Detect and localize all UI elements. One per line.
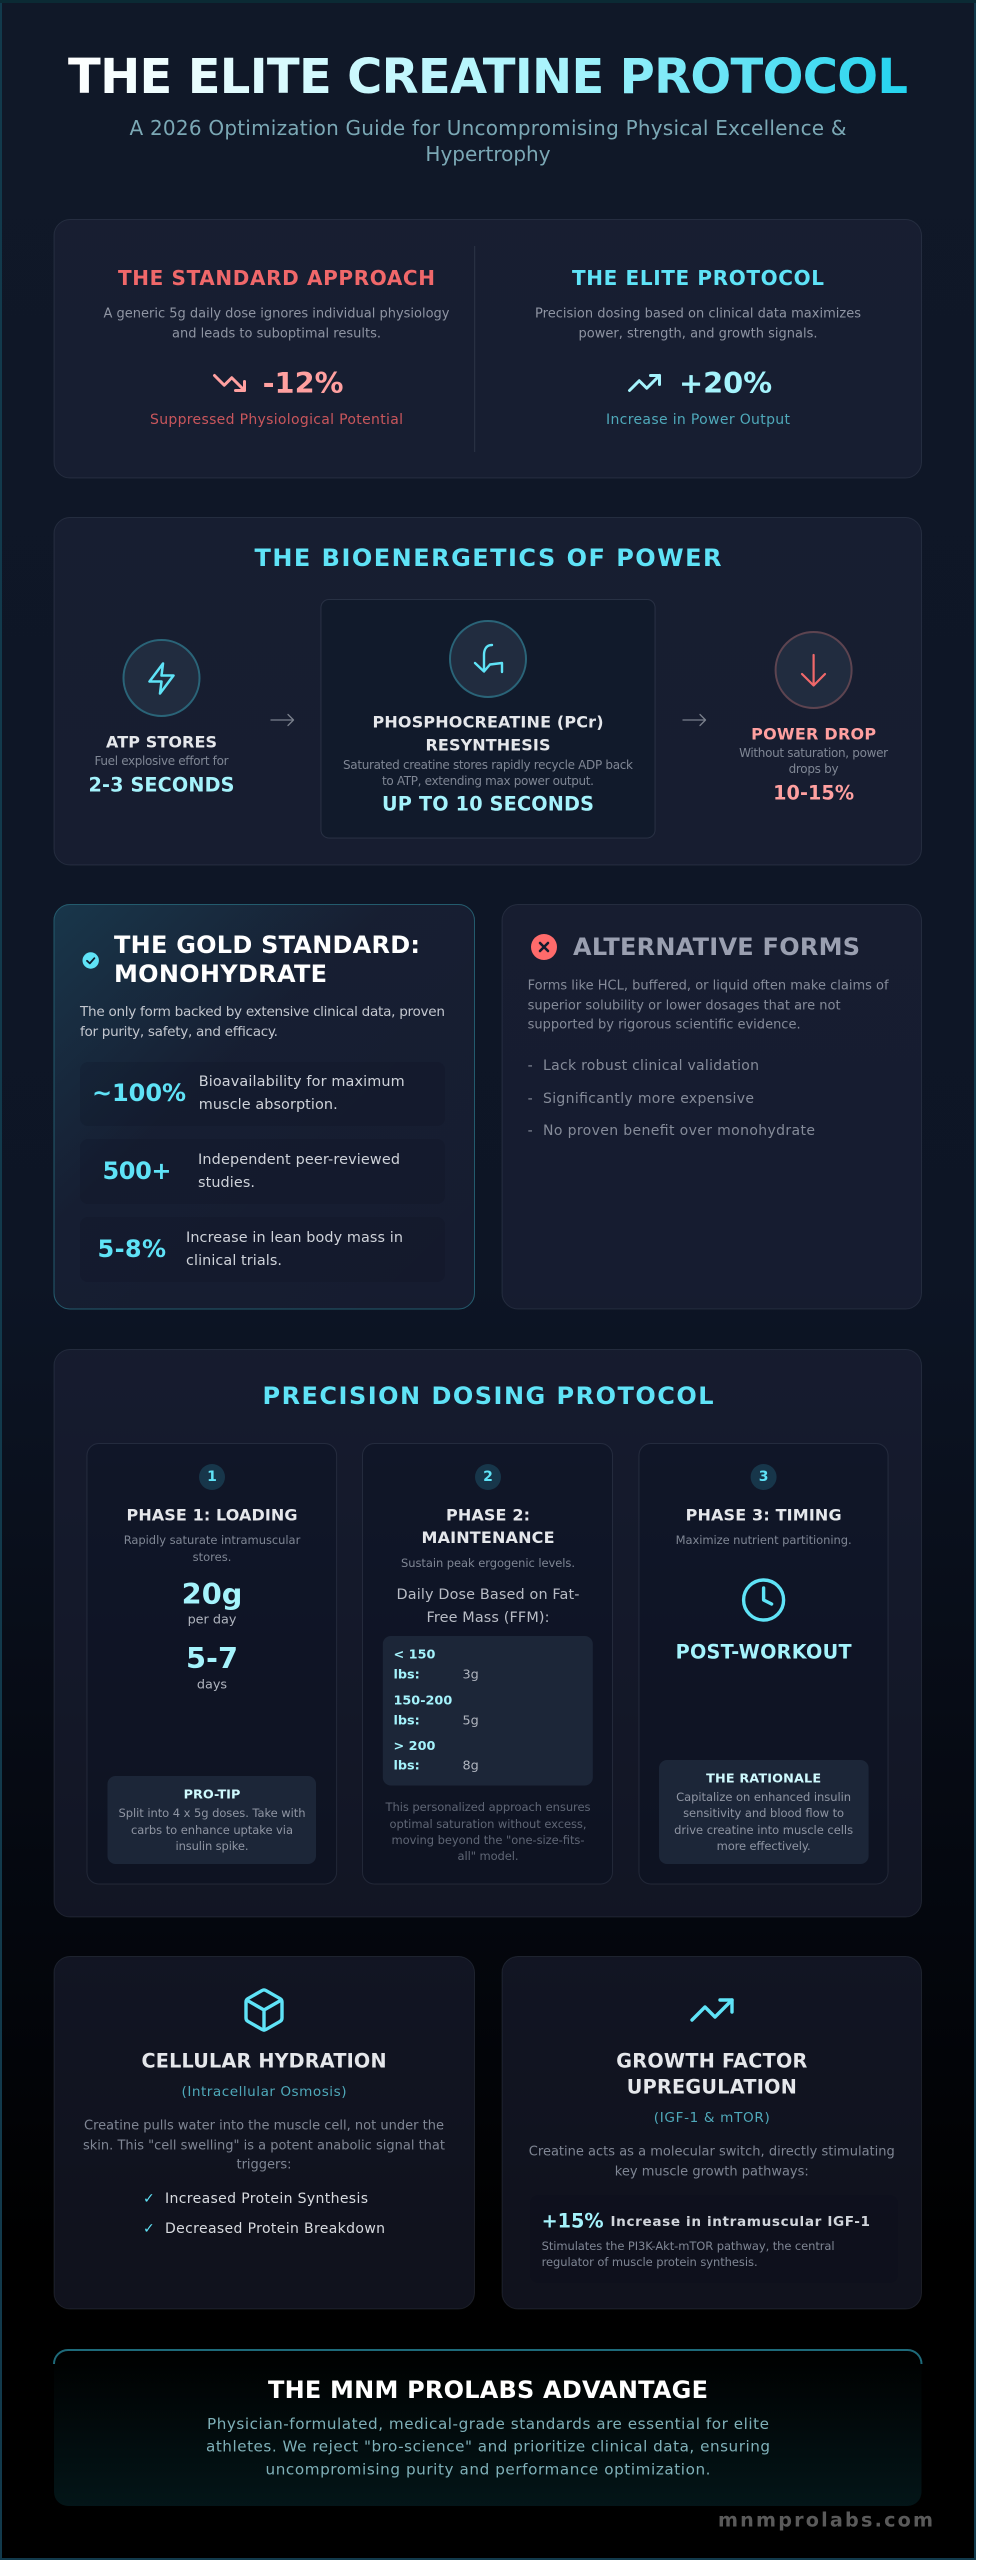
stat: bioavailability	[80, 1062, 445, 1126]
rationale: more effectively.	[717, 1839, 811, 1853]
IGF-1 stat: Stimulates the PI3K-Akt-mTOR pathway, the central	[542, 2239, 835, 2253]
panel: precision dosing protocol	[54, 1350, 922, 1917]
rationale: drive creatine into muscle cells	[674, 1823, 853, 1837]
standard approach column: and leads to suboptimal results.	[172, 326, 381, 342]
card: phase 1: Rapidly saturate intramuscular	[124, 1533, 301, 1547]
note: optimal saturation without excess,	[390, 1817, 586, 1831]
panel: growth factor upregulation: Creatine acts as a molecular switch, directly stimulating	[529, 2144, 895, 2160]
elite protocol column: +20%	[679, 366, 772, 400]
list of drawbacks: Lack robust clinical validation	[543, 1058, 759, 1074]
elite protocol column: power, strength, and growth signals.	[578, 326, 818, 342]
benefit list: ✓	[143, 2221, 155, 2237]
icon: clock	[742, 1578, 786, 1622]
icon: check badge	[82, 952, 99, 969]
benefit list: ✓	[143, 2191, 155, 2207]
stat: bioavailability: muscle absorption.	[199, 1097, 338, 1113]
dose table: 5g	[462, 1714, 479, 1728]
description	[528, 978, 889, 1032]
pro-tip: carbs to enhance uptake via	[131, 1823, 293, 1837]
card: phase 3: POST-WORKOUT	[676, 1640, 852, 1664]
rationale: sensitivity and blood flow to	[683, 1806, 844, 1820]
description: for purity, safety, and efficacy.	[80, 1024, 278, 1040]
stat: bioavailability: ~100%	[92, 1079, 186, 1107]
power drop step: POWER DROP	[751, 724, 876, 744]
elite protocol column: Precision dosing based on clinical data maximizes	[535, 306, 861, 322]
panel: MNM Prolabs advantage: athletes. We reject "bro-science" and prioritize clinical data, ensuring	[206, 2438, 770, 2456]
pro-tip: Split into 4 x 5g doses. Take with	[118, 1806, 306, 1820]
icon: cube	[244, 1988, 284, 2032]
icon: recycle arrows	[475, 645, 502, 672]
pro-tip: insulin spike.	[176, 1839, 248, 1853]
panel: growth factor upregulation	[502, 1956, 922, 2309]
arrow	[271, 714, 294, 726]
stat: studies	[80, 1139, 445, 1204]
dose table: > 200	[394, 1739, 435, 1754]
icon: x badge	[531, 934, 557, 960]
card: phase 1: PHASE 1: LOADING	[126, 1506, 298, 1524]
phosphocreatine step: RESYNTHESIS	[426, 736, 550, 754]
title: THE ELITE CREATINE PROTOCOL	[68, 49, 908, 105]
card: phase 2: MAINTENANCE	[422, 1528, 554, 1547]
card: phase 2	[362, 1444, 612, 1884]
card: phase 1	[87, 1444, 337, 1884]
phosphocreatine step: UP TO 10 SECONDS	[382, 792, 594, 816]
stat: studies: studies.	[198, 1175, 255, 1191]
card: phase 2: Sustain peak ergogenic levels.	[401, 1556, 575, 1570]
rationale: THE RATIONALE	[706, 1772, 821, 1786]
stat: studies: Independent peer-reviewed	[198, 1152, 400, 1168]
dose table: 8g	[462, 1758, 479, 1774]
stat: lean mass: clinical trials.	[186, 1253, 282, 1269]
icon: arrow down	[802, 655, 825, 686]
dose table: lbs:	[394, 1714, 420, 1728]
description: Forms like HCL, buffered, or liquid often make claims of	[528, 978, 889, 994]
card: phase 2: 2	[483, 1469, 493, 1485]
phosphocreatine step: Saturated creatine stores rapidly recycle ADP back	[343, 758, 633, 772]
pro-tip: PRO-TIP	[184, 1788, 240, 1802]
dose table: lbs:	[394, 1668, 420, 1682]
icon: trending down	[212, 374, 246, 392]
benefit list: Decreased Protein Breakdown	[165, 2221, 385, 2237]
card: phase 1: 20g	[182, 1577, 242, 1611]
elite protocol column	[535, 266, 861, 428]
panel: MNM Prolabs advantage	[54, 2349, 922, 2506]
card: phase 3: Maximize nutrient partitioning.	[676, 1533, 852, 1547]
standard approach column: Suppressed Physiological Potential	[150, 412, 403, 428]
card: phase 1: per day	[188, 1612, 237, 1628]
heading: ALTERNATIVE FORMS	[573, 933, 860, 961]
ATP stores step	[88, 640, 234, 796]
description: supported by rigorous scientific evidence.	[528, 1018, 801, 1032]
card: phase 2: Free Mass (FFM):	[426, 1610, 550, 1626]
card: phase 1: 5-7	[186, 1641, 238, 1675]
panel: MNM Prolabs advantage: THE MNM PROLABS ADVANTAGE	[268, 2376, 708, 2404]
card: phase 1: 1	[207, 1469, 217, 1485]
phosphocreatine step: to ATP, extending max power output.	[382, 774, 594, 788]
stat: lean mass: 5-8%	[98, 1235, 166, 1263]
card: phase 3	[639, 1444, 888, 1884]
dose table	[383, 1636, 593, 1786]
standard approach column	[104, 266, 450, 428]
benefit list: Increased Protein Synthesis	[165, 2191, 368, 2207]
list of drawbacks: Significantly more expensive	[543, 1091, 754, 1107]
standard approach column: A generic 5g daily dose ignores individual physiology	[104, 306, 450, 322]
stat: bioavailability: Bioavailability for maximum	[199, 1074, 405, 1090]
arrow	[683, 714, 706, 726]
phosphocreatine step	[321, 600, 655, 838]
card: phase 1: stores.	[193, 1550, 231, 1564]
subtitle	[130, 116, 846, 166]
heading: MONOHYDRATE	[114, 960, 327, 988]
panel: cellular hydration: CELLULAR HYDRATION	[142, 2050, 386, 2072]
note	[384, 1800, 590, 1863]
IGF-1 stat: +15%	[542, 2210, 604, 2232]
power drop step: drops by	[789, 762, 839, 776]
panel: MNM Prolabs advantage: uncompromising purity and performance optimization.	[266, 2460, 710, 2478]
panel: cellular hydration: triggers:	[236, 2158, 292, 2172]
list of drawbacks: No proven benefit over monohydrate	[543, 1123, 815, 1139]
panel: cellular hydration: (Intracellular Osmosis)	[182, 2084, 346, 2100]
description: superior solubility or lower dosages that are not	[528, 998, 841, 1014]
panel: standard vs elite comparison	[54, 220, 922, 478]
card: phase 1: days	[197, 1678, 227, 1692]
panel: bioenergetics	[54, 518, 922, 865]
stat: lean mass: Increase in lean body mass in	[186, 1230, 403, 1246]
IGF-1 stat	[530, 2195, 898, 2283]
heading	[114, 931, 420, 988]
dose table: lbs:	[394, 1758, 420, 1774]
dose table: 150-200	[394, 1694, 452, 1708]
panel: growth factor upregulation: GROWTH FACTOR	[616, 2050, 808, 2072]
power drop step: 10-15%	[773, 782, 854, 804]
stat: studies: 500+	[102, 1157, 172, 1185]
standard approach column: -12%	[263, 366, 343, 400]
list of drawbacks: -	[528, 1091, 533, 1107]
note: all" model.	[458, 1849, 518, 1863]
panel: cellular hydration: Creatine pulls water into the muscle cell, not under the	[84, 2118, 444, 2134]
footer website: mnmprolabs.com	[718, 2508, 933, 2532]
icon: trending up	[690, 1998, 734, 2022]
list of drawbacks	[528, 1058, 815, 1139]
card: phase 3: PHASE 3: TIMING	[686, 1506, 842, 1524]
benefit list	[143, 2191, 385, 2237]
pro-tip	[108, 1776, 316, 1864]
heading: PRECISION DOSING PROTOCOL	[262, 1382, 714, 1410]
note: This personalized approach ensures	[384, 1800, 590, 1814]
card: phase 3: 3	[759, 1469, 768, 1485]
subtitle: Hypertrophy	[425, 142, 551, 166]
panel: growth factor upregulation: key muscle growth pathways:	[615, 2164, 809, 2180]
dose table: 3g	[462, 1668, 479, 1682]
elite protocol column: THE ELITE PROTOCOL	[572, 266, 824, 290]
list of drawbacks: -	[528, 1123, 533, 1139]
phosphocreatine step: PHOSPHOCREATINE (PCr)	[372, 712, 604, 732]
icon: lightning	[148, 662, 175, 695]
standard approach column: THE STANDARD APPROACH	[118, 266, 435, 290]
rationale	[659, 1760, 869, 1864]
heading: THE BIOENERGETICS OF POWER	[254, 544, 722, 572]
panel: alternative forms	[502, 904, 922, 1309]
stat: lean mass	[80, 1217, 445, 1282]
panel: growth factor upregulation: (IGF-1 & mTOR)	[654, 2110, 770, 2126]
panel: gold standard monohydrate	[54, 904, 474, 1309]
panel: cellular hydration: skin. This "cell swelling" is a potent anabolic signal that	[83, 2138, 445, 2154]
panel: growth factor upregulation: UPREGULATION	[627, 2076, 797, 2098]
IGF-1 stat: regulator of muscle protein synthesis.	[542, 2255, 758, 2269]
description	[79, 1004, 445, 1040]
ATP stores step: Fuel explosive effort for	[94, 754, 229, 768]
note: moving beyond the "one-size-fits-	[392, 1833, 584, 1847]
panel: cellular hydration	[54, 1956, 474, 2309]
power drop step: Without saturation, power	[739, 746, 888, 760]
panel: MNM Prolabs advantage: Physician-formulated, medical-grade standards are essential for elite	[207, 2415, 769, 2433]
heading: THE GOLD STANDARD:	[114, 931, 420, 959]
elite protocol column: Increase in Power Output	[606, 412, 790, 428]
rationale: Capitalize on enhanced insulin	[676, 1790, 851, 1804]
subtitle: A 2026 Optimization Guide for Uncompromising Physical Excellence &	[130, 116, 846, 140]
IGF-1 stat: Increase in intramuscular IGF-1	[610, 2214, 870, 2230]
ATP stores step: 2-3 SECONDS	[88, 774, 234, 796]
dose table: < 150	[394, 1648, 435, 1662]
card: phase 2: Daily Dose Based on Fat-	[396, 1587, 580, 1603]
card: phase 2: PHASE 2:	[446, 1506, 530, 1524]
description: The only form backed by extensive clinical data, proven	[79, 1004, 445, 1020]
list of drawbacks: -	[528, 1058, 533, 1074]
power drop step	[739, 632, 888, 804]
ATP stores step: ATP STORES	[106, 732, 217, 752]
icon: trending up	[628, 374, 662, 392]
